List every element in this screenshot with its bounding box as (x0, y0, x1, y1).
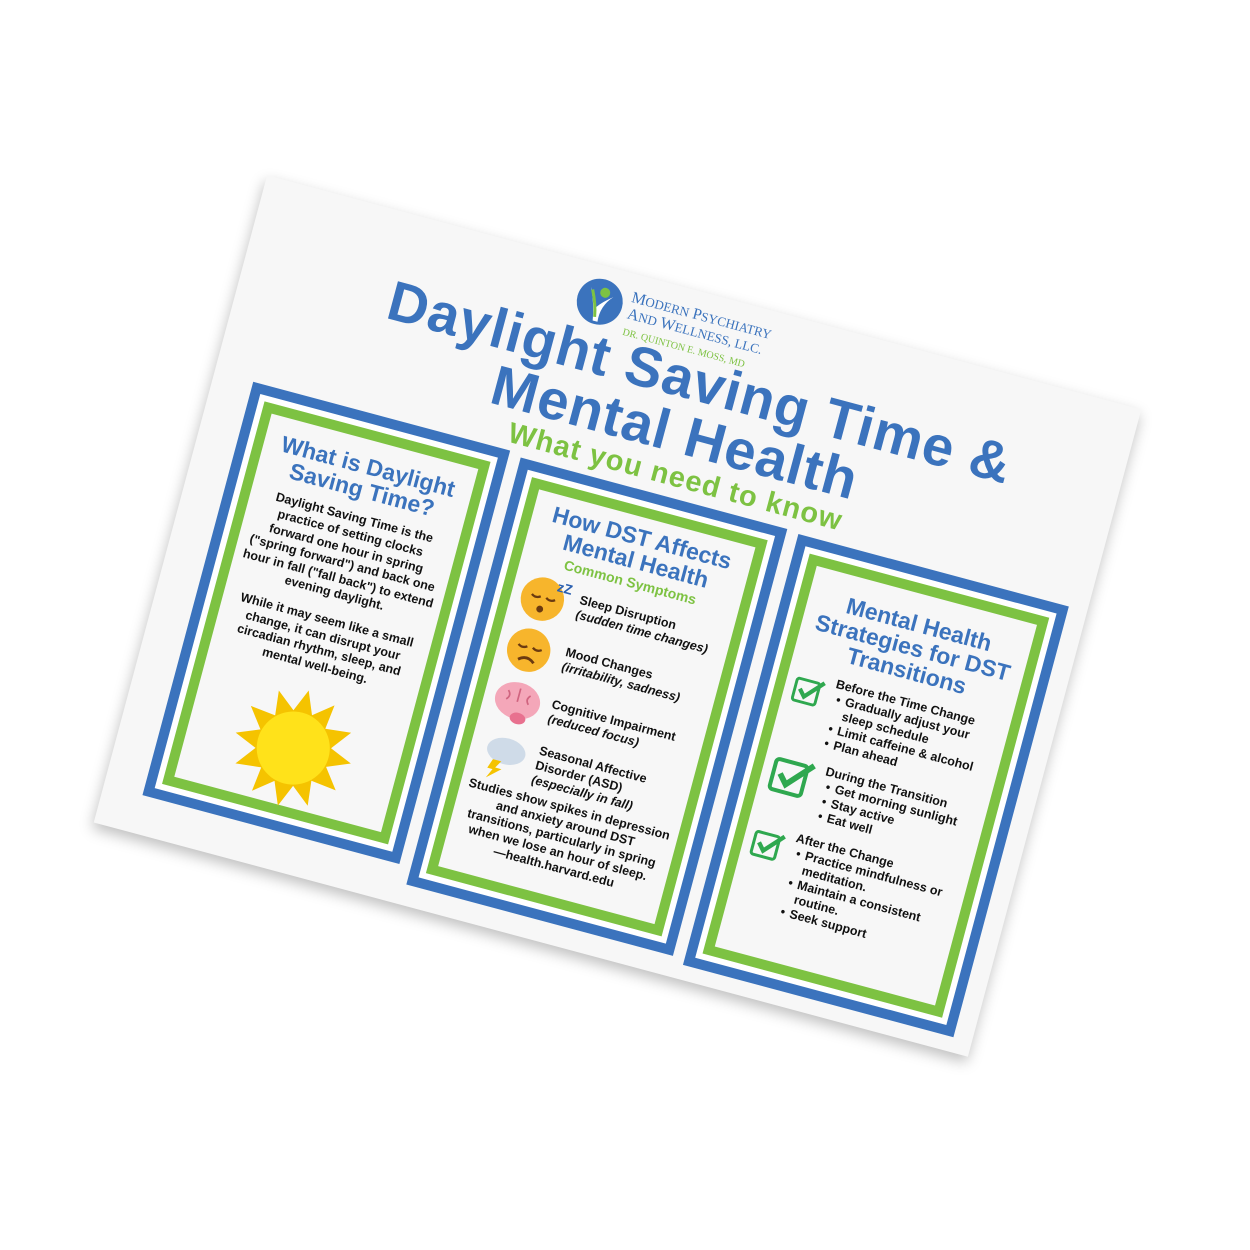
title: Daylight Saving Time & (381, 268, 1019, 496)
heading: Transitions (844, 643, 969, 699)
strategy: during (768, 757, 959, 837)
strategy: after (750, 830, 944, 941)
panel: how DST affects mental health (406, 458, 787, 956)
title: Mental Health (485, 353, 865, 511)
symptom: mood: (irritability, sadness) (560, 660, 681, 705)
strategy: after: Seek support (788, 907, 868, 941)
symptom: mood: Mood Changes (564, 645, 654, 682)
logo text (621, 289, 773, 370)
heading: Mental Health (560, 529, 711, 593)
logo text: DR. QUINTON E. MOSS, MD (621, 326, 746, 370)
logo text: AND WELLNESS, LLC. (625, 305, 764, 357)
strategy: after: Maintain a consistent routine. (792, 878, 922, 925)
symptom: seasonal: Disorder (ASD) (534, 758, 624, 795)
paper sheet (94, 175, 1141, 1057)
heading: Saving Time? (287, 458, 437, 522)
icon: logo circle (576, 278, 623, 325)
text block: Daylight Saving Time is the practice of setting clocks forward one hour in spring ("spring forward") and back one hour in fall ("fall back") to extend evening daylight. (241, 490, 436, 613)
strategy: after: After the Change (794, 831, 895, 871)
symptom: seasonal: Seasonal Affective (538, 743, 648, 786)
symptom: sleep: Sleep Disruption (578, 593, 678, 632)
strategy: during: Get morning sunlight (833, 783, 959, 829)
strategy: during: During the Transition (824, 765, 949, 811)
symptom: cognitive: Cognitive Impairment (550, 698, 677, 744)
symptom: sleep: (sudden time changes) (574, 608, 709, 656)
panel: what is DST: While it may seem like a small change, it can disrupt your circadian rhythm, sleep, and mental well-being. (236, 590, 415, 686)
subheading: Common Symptoms (562, 557, 698, 608)
panel: what is DST (142, 382, 510, 864)
strategy: before: Before the Time Change (834, 678, 977, 728)
symptom: mood (507, 628, 681, 705)
text block: study: Studies show spikes in depression and anxiety around DST transitions, particularly in spring when we lose an hour of sleep. (466, 776, 671, 883)
heading: Strategies for DST (813, 609, 1013, 686)
strategy: before: Plan ahead (832, 739, 899, 770)
strategy: before: Gradually adjust your sleep schedule (840, 696, 971, 747)
heading: What is Daylight (278, 431, 458, 502)
heading: Mental Health (844, 592, 995, 656)
strategy: after: Practice mindfulness or meditation. (800, 849, 944, 900)
strategy: before: Limit caffeine & alcohol (836, 725, 975, 774)
symptom: seasonal: (especially in fall) (530, 772, 634, 813)
strategy: during: Eat well (825, 812, 874, 837)
symptom: sleep (520, 577, 709, 656)
strategy: before (790, 676, 977, 774)
strategy: during: Stay active (829, 797, 896, 828)
logo text: MODERN PSYCHIATRY (630, 289, 773, 342)
symptom: seasonal (486, 738, 648, 813)
panel: strategies (683, 534, 1069, 1037)
icon: sun (236, 690, 351, 806)
symptom: sleep: zZ (556, 580, 574, 598)
logo (576, 278, 773, 370)
text block: study: —health.harvard.edu (492, 844, 616, 890)
symptom: cognitive (494, 682, 677, 750)
heading: How DST Affects (550, 501, 735, 574)
symptom: cognitive: (reduced focus) (546, 712, 640, 750)
subtitle: What you need to know (505, 417, 846, 537)
